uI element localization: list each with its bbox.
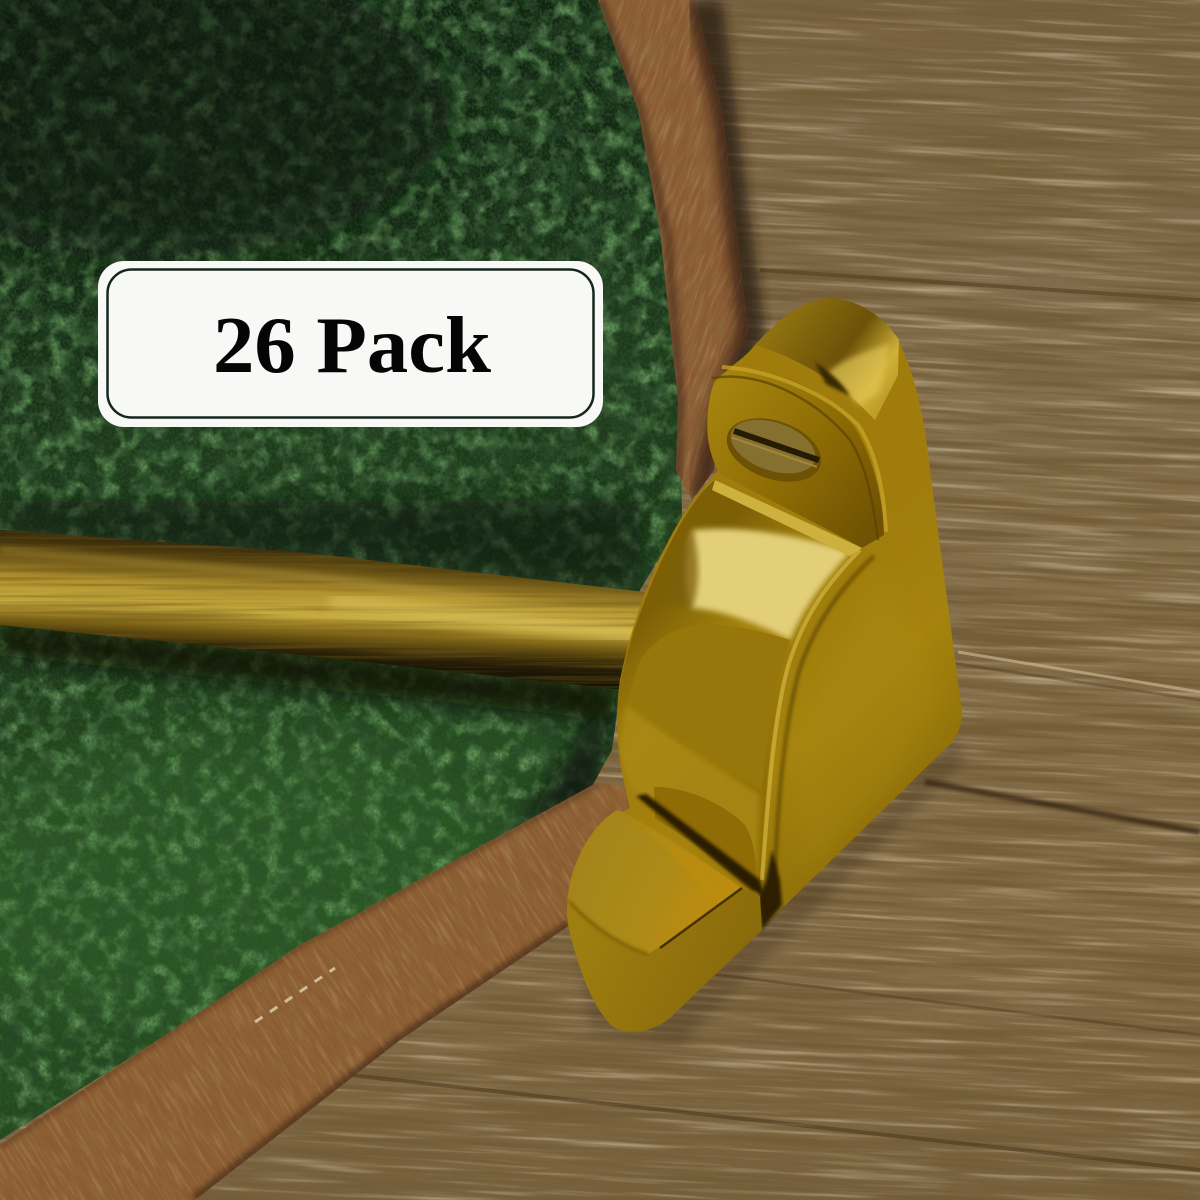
brass stair rod <box>0 530 645 690</box>
bracket: foot top <box>568 810 742 954</box>
carpet: green pile <box>0 0 700 1200</box>
bracket: screw ear <box>707 367 884 548</box>
label: text: 26 Pack <box>213 302 492 390</box>
brass rod bracket <box>567 298 962 1031</box>
bracket: main body <box>567 298 962 1031</box>
bracket: barrel edge highlight <box>762 550 860 880</box>
pack-size label <box>98 261 603 427</box>
bracket: recess above foot <box>654 787 756 884</box>
label: white plate <box>98 261 603 427</box>
label: inner border <box>108 270 594 418</box>
carpet binding: upper brown edge <box>598 0 748 500</box>
bracket: back cap <box>755 298 899 420</box>
bracket: slotted screw <box>718 407 830 493</box>
bracket: curved barrel <box>617 480 862 892</box>
shadow along carpet edge <box>580 0 965 1045</box>
bracket: right-side reflection <box>795 560 945 880</box>
bracket: foot front <box>567 888 762 1031</box>
carpet binding: lower brown edge <box>0 770 660 1200</box>
